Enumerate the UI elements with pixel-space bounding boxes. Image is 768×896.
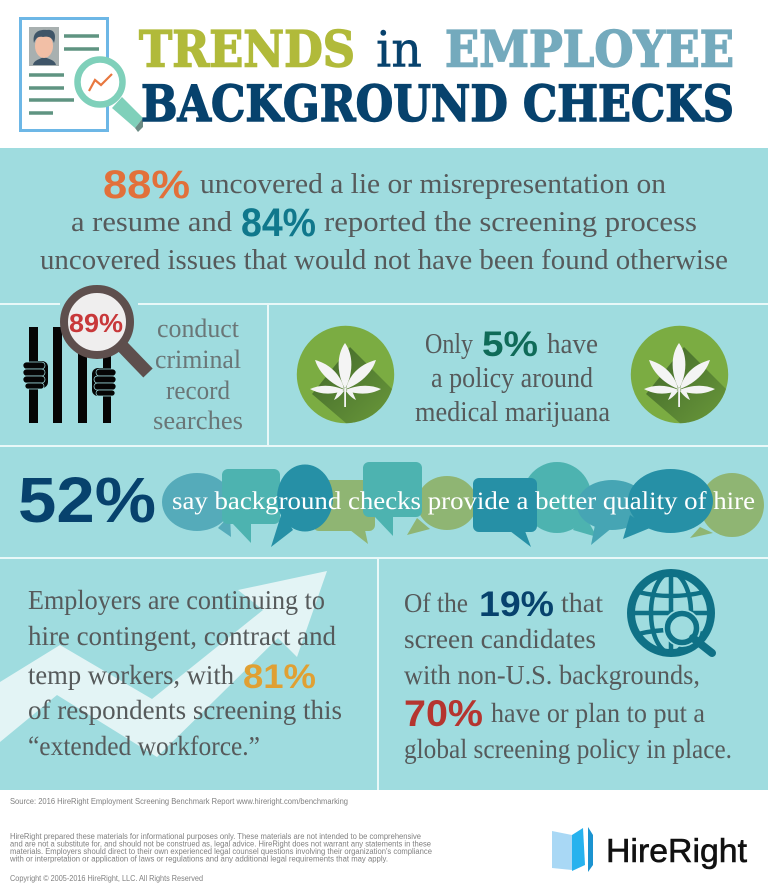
text block: extended workforce [28, 585, 342, 761]
text block: criminal record: searches [153, 406, 243, 435]
text block: marijuana policy: medical marijuana [415, 397, 611, 428]
title [139, 20, 734, 133]
stat: 52%: 52% [18, 464, 156, 536]
text block: marijuana policy: have [547, 329, 598, 360]
arrow [0, 571, 327, 757]
title: in [376, 20, 422, 78]
text block: global screening: screen candidates [404, 624, 596, 654]
text block: extended workforce: temp workers, with [28, 660, 234, 690]
icon: marijuana leaf right [631, 326, 734, 435]
text block: key statistics: uncovered issues that would not have been found otherwise [40, 244, 728, 276]
icon: prison bars with magnifier [23, 289, 148, 423]
dividers [0, 304, 768, 790]
text block: marijuana policy: 5% [482, 325, 538, 364]
text: quality of hire: say background checks provide a better quality of hire [172, 488, 755, 515]
text block: key statistics: reported the screening process [324, 206, 697, 238]
legal disclaimer: materials. Employers should direct to their own experienced legal counsel questions involving their organization's compliance [10, 847, 433, 856]
icon: globe with magnifier [631, 573, 712, 653]
text block: criminal record: conduct [157, 314, 240, 343]
text block: criminal record: record [166, 376, 230, 405]
title: TRENDS [139, 20, 355, 78]
text block: marijuana policy: a policy around [431, 363, 593, 394]
text block: global screening: that [561, 588, 604, 618]
icon: resume with magnifier [20, 18, 143, 132]
text block: extended workforce: “extended workforce.” [28, 731, 260, 761]
text block: global screening: Of the [404, 588, 468, 618]
source note: Source: 2016 HireRight Employment Screening Benchmark Report www.hireright.com/benchmarking [10, 797, 348, 806]
text block: key statistics [40, 163, 728, 276]
text block: global screening: with non-U.S. backgrounds, [404, 660, 700, 690]
text block: key statistics: 88% [103, 163, 190, 207]
text block: criminal record: criminal [155, 345, 241, 374]
text block: key statistics: a resume and [71, 206, 233, 238]
legal disclaimer [9, 832, 433, 864]
text block: key statistics: uncovered a lie or misrepresentation on [200, 168, 666, 200]
text block: extended workforce: Employers are continuing to [28, 585, 325, 615]
text block: global screening [404, 585, 732, 764]
text block: extended workforce: 81% [243, 658, 316, 696]
copyright: Copyright © 2005-2016 HireRight, LLC. All Rights Reserved [10, 874, 203, 883]
title: EMPLOYEE [445, 20, 734, 78]
text block: key statistics: 84% [241, 201, 316, 245]
panel: teal band [0, 148, 768, 790]
logo [552, 827, 747, 872]
text block: global screening: global screening policy in place. [404, 734, 732, 764]
text block: marijuana policy [415, 325, 611, 428]
text block: global screening: 19% [479, 585, 554, 624]
text block: global screening: 70% [404, 693, 483, 734]
legal disclaimer: and are not a substitute for, and should not be construed as, legal advice. HireRight does not warrant any statements in these [10, 840, 432, 848]
text block: extended workforce: hire contingent, contract and [28, 621, 336, 651]
text block: marijuana policy: Only [425, 329, 473, 360]
legal disclaimer: with or interpretation or application of laws or regulations and any additional legal requirements that may apply. [9, 854, 388, 864]
legal disclaimer: HireRight prepared these materials for informational purposes only. These materials are not intended to be comprehensive [10, 832, 422, 841]
speech bubbles [162, 462, 764, 547]
text block: extended workforce: of respondents screening this [28, 695, 342, 725]
icon: marijuana leaf left [297, 326, 400, 435]
text block: global screening: have or plan to put a [491, 698, 705, 728]
text block: criminal record [153, 314, 243, 435]
icon: prison bars with magnifier: 89% [69, 308, 123, 338]
logo: HireRight [606, 832, 747, 869]
